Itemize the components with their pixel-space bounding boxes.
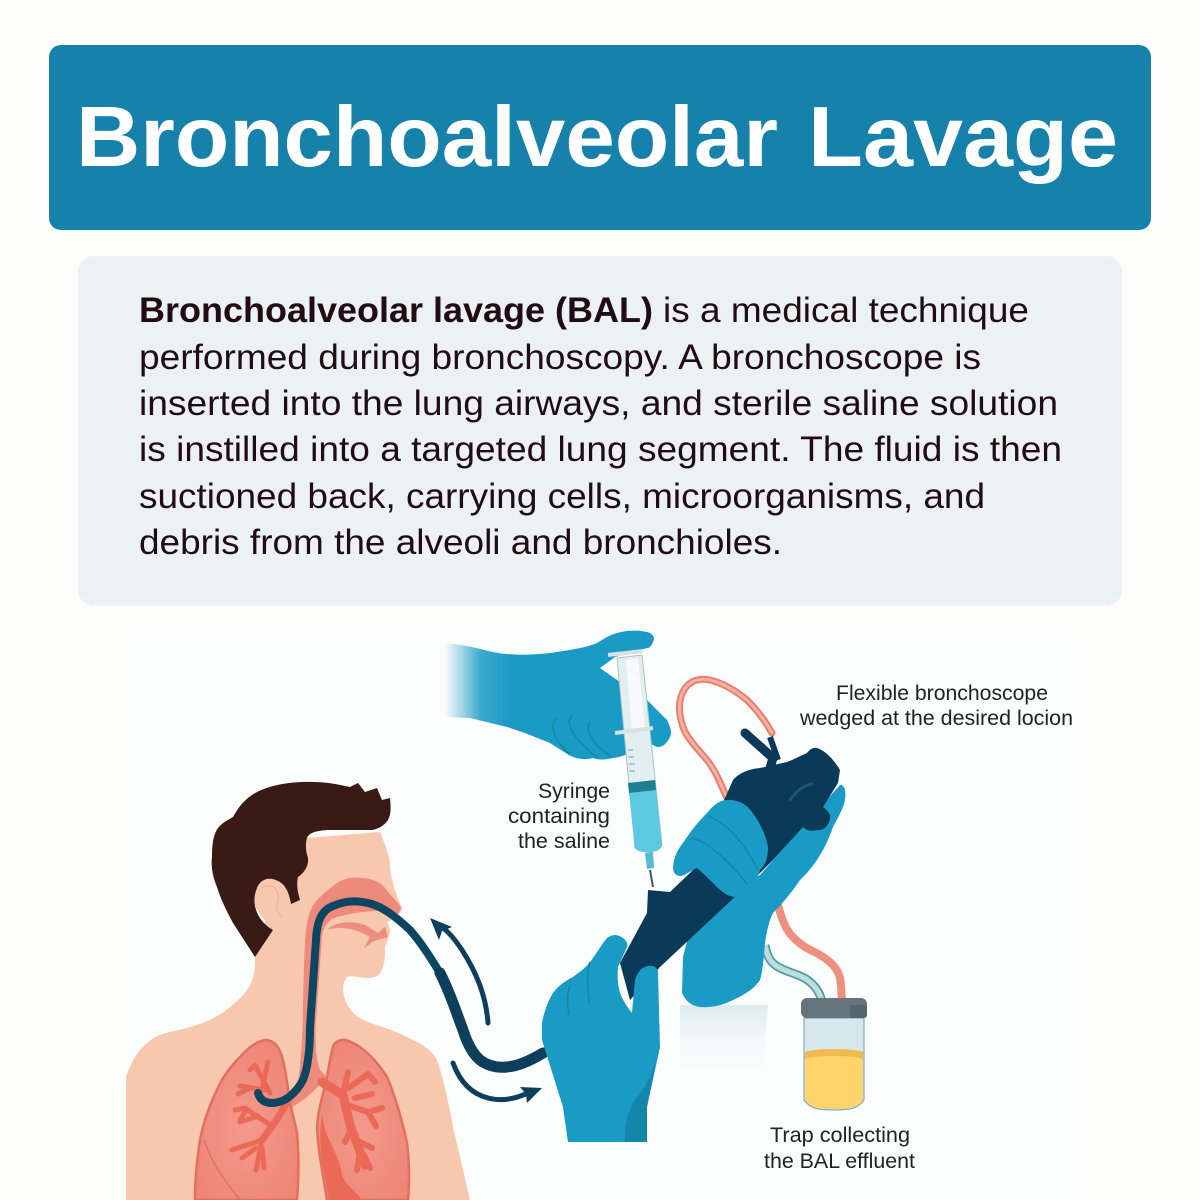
label: trap bbox=[764, 1123, 915, 1173]
scope control body bbox=[620, 733, 840, 1000]
panel: definition text: is instilled into a targeted lung segment. The fluid is then bbox=[139, 430, 1062, 469]
panel: definition text: Bronchoalveolar lavage (BAL) bbox=[139, 291, 653, 330]
right gloved hand palm bbox=[682, 785, 845, 1007]
panel: definition text: inserted into the lung airways, and sterile saline solution bbox=[139, 384, 1058, 423]
title banner: Lavage bbox=[808, 90, 1118, 185]
patient torso and head bbox=[126, 832, 470, 1200]
arrow: downward flow bbox=[453, 1063, 542, 1103]
left lung bbox=[195, 1040, 298, 1200]
label: bronchoscope: wedged at the desired locion bbox=[799, 706, 1073, 730]
label: trap: Trap collecting bbox=[770, 1123, 910, 1147]
airway bbox=[280, 878, 401, 1112]
label: trap: the BAL effluent bbox=[764, 1149, 915, 1173]
teal tube bbox=[765, 945, 822, 1002]
panel: definition text bbox=[78, 256, 1122, 606]
syringe bbox=[608, 651, 662, 887]
arrow: upward flow bbox=[430, 918, 488, 1023]
panel: definition text: suctioned back, carrying cells, microorganisms, and bbox=[139, 477, 985, 516]
panel: definition text: performed during bronchoscopy. A bronchoscope is bbox=[139, 338, 981, 377]
ear bbox=[253, 878, 292, 930]
suction tube bbox=[679, 679, 772, 798]
lower gloved hand bbox=[542, 935, 660, 1142]
lower salmon tube bbox=[778, 905, 842, 1002]
illustration: bronchoalveolar lavage procedure bbox=[126, 630, 1080, 1200]
hand shadow bbox=[680, 1005, 768, 1078]
title banner bbox=[49, 45, 1151, 230]
label: syringe: the saline bbox=[518, 829, 610, 853]
title banner: Bronchoalveolar bbox=[76, 90, 778, 185]
label: bronchoscope bbox=[799, 681, 1073, 730]
panel: definition text: is a medical technique bbox=[663, 291, 1029, 330]
upper gloved hand bbox=[443, 631, 671, 760]
bronchoscope tube bbox=[258, 901, 543, 1103]
label: syringe: containing bbox=[508, 804, 610, 828]
panel: definition text: debris from the alveoli and bronchioles. bbox=[139, 523, 782, 562]
hair bbox=[212, 782, 391, 957]
right hand fingers bbox=[673, 800, 768, 897]
collection trap bbox=[801, 998, 867, 1110]
label: bronchoscope: Flexible bronchoscope bbox=[836, 681, 1048, 705]
label: syringe: Syringe bbox=[538, 779, 610, 803]
right lung bbox=[317, 1040, 409, 1200]
label: syringe bbox=[508, 779, 610, 853]
